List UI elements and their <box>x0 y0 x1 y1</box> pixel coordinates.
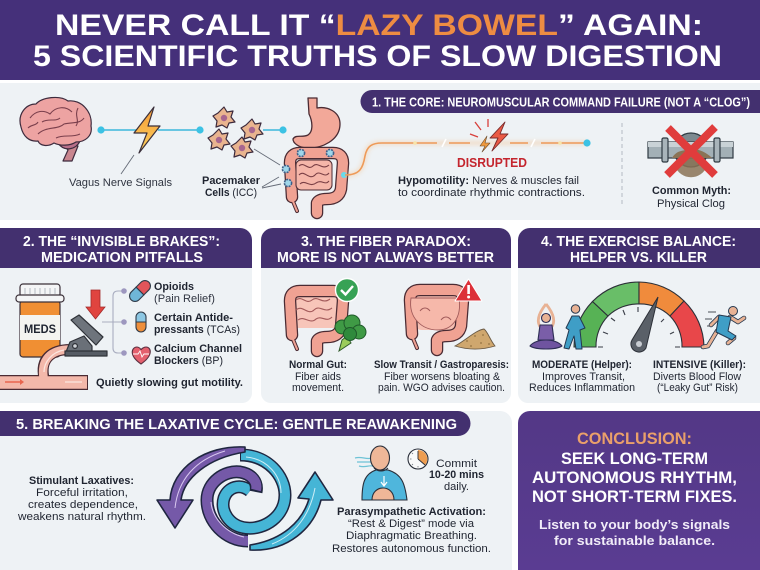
text: commit: Commit <box>436 458 477 470</box>
title line 1: NEVER CALL IT “ LAZY BOWEL ” AGAIN: <box>55 9 703 42</box>
text: intensive: (“Leaky Gut” Risk) <box>657 382 738 394</box>
text: parasympathetic activation: Restores autonomous function. <box>332 543 491 555</box>
header banner <box>0 0 760 80</box>
icon: fiber pile <box>455 329 495 349</box>
label: pacemaker cells <box>202 175 261 199</box>
conclusion statement <box>532 450 737 506</box>
label: pacemaker cells: Pacemaker <box>202 175 261 187</box>
icon: green check <box>336 278 358 302</box>
icon: brain <box>20 97 91 161</box>
text: slow transit: Slow Transit / Gastroparesis: <box>374 359 509 371</box>
text: commit: 10-20 mins <box>429 469 484 481</box>
icon: meds bottle: MEDS <box>24 324 56 336</box>
icon: brake pedal <box>65 315 107 356</box>
purple outer arrow <box>157 447 245 528</box>
cyan inner spiral <box>223 455 285 528</box>
text: moderate <box>529 359 635 394</box>
conclusion subtext <box>539 517 730 548</box>
panel 4 heading: HELPER VS. KILLER <box>570 250 707 266</box>
text: normal gut: Normal Gut: <box>289 359 347 371</box>
panel 3 heading: MORE IS NOT ALWAYS BETTER <box>277 250 495 266</box>
panel 3 heading: 3. THE FIBER PARADOX: <box>301 234 471 250</box>
text: parasympathetic activation: Diaphragmatic Breathing. <box>346 530 477 542</box>
pointer lines <box>121 149 281 188</box>
text: parasympathetic activation: Parasympathetic Activation: <box>337 506 486 518</box>
panel: conclusion <box>518 411 760 570</box>
title line 2: 5 SCIENTIFIC TRUTHS OF SLOW DIGESTION <box>33 40 722 73</box>
cyan outer arrow <box>250 472 333 550</box>
text: quietly slowing: Quietly slowing gut motility. <box>96 377 243 389</box>
panel 5 heading pill: 5. BREAKING THE LAXATIVE CYCLE: GENTLE REAWAKENING <box>16 417 457 433</box>
icon: walking figure <box>564 305 585 349</box>
icon: stomach <box>293 98 340 148</box>
panel 3: fiber paradox <box>261 228 511 403</box>
conclusion statement: SEEK LONG-TERM <box>561 450 708 468</box>
text: stimulant laxatives: Stimulant Laxatives: <box>29 475 134 487</box>
text: intensive: Diverts Blood Flow <box>653 371 741 383</box>
text: common myth: Physical Clog <box>657 198 725 210</box>
text: stimulant laxatives <box>17 475 146 523</box>
icon: clock <box>408 449 428 469</box>
spiral: laxative cycle arrows <box>157 447 333 550</box>
icon: pacemaker cells <box>208 107 263 158</box>
text: slow transit: pain. WGO advises caution. <box>378 382 505 394</box>
text: stimulant laxatives: Forceful irritation, <box>36 487 128 499</box>
panel 2 heading <box>0 228 252 268</box>
text: opioids: Opioids <box>154 281 194 293</box>
text: normal gut: movement. <box>292 382 344 394</box>
gauge needle <box>631 297 658 352</box>
icon: broken signal spark <box>470 119 508 152</box>
disrupted signal line <box>345 139 591 175</box>
vagus signal line <box>97 126 287 134</box>
icon: clogged pipe with cross <box>648 127 733 177</box>
text: intensive <box>653 359 746 394</box>
text: calcium channel blockers: Calcium Channel <box>154 343 242 355</box>
conclusion subtext: Listen to your body’s signals <box>539 517 730 532</box>
text: hypomotility: Hypomotility: Nerves & muscles fail <box>398 175 579 187</box>
panel 2: medication pitfalls <box>0 228 252 403</box>
text: slow transit <box>374 359 509 394</box>
purple inner spiral <box>207 472 256 541</box>
panel 1 heading pill <box>361 90 760 113</box>
icon: red down arrow <box>86 290 105 319</box>
text: moderate: Improves Transit, <box>542 371 625 383</box>
conclusion subtext: for sustainable balance. <box>554 533 715 548</box>
icon: colon with ICC cells <box>282 149 347 213</box>
conclusion statement: NOT SHORT-TERM FIXES. <box>532 488 737 506</box>
icon: heart <box>132 347 150 364</box>
icon: normal gut <box>290 291 343 351</box>
panel 4 heading <box>518 228 760 268</box>
text: moderate: MODERATE (Helper): <box>532 359 632 371</box>
icon: lightning bolt <box>134 107 160 153</box>
text: commit <box>429 458 484 493</box>
text: hypomotility <box>398 175 585 199</box>
text: opioids <box>154 281 215 305</box>
text: stimulant laxatives: weakens natural rhythm. <box>17 511 146 523</box>
text: hypomotility: to coordinate rhythmic contractions. <box>398 187 585 199</box>
text: parasympathetic activation: “Rest & Digest” mode via <box>348 518 475 530</box>
conclusion heading: CONCLUSION: <box>577 430 692 448</box>
icon: pill <box>127 278 153 304</box>
icon: warning triangle <box>455 279 482 301</box>
text: normal gut <box>289 359 347 394</box>
icon: yoga figure <box>530 304 562 349</box>
text: normal gut: Fiber aids <box>295 371 341 383</box>
text: antidepressants: Certain Antide- <box>154 312 233 324</box>
text: common myth: Common Myth: <box>652 185 731 197</box>
text: slow transit: Fiber worsens bloating & <box>384 371 501 383</box>
conclusion statement: AUTONOMOUS RHYTHM, <box>532 469 737 487</box>
icon: gut tube <box>0 349 88 385</box>
label: vagus nerve signals: Vagus Nerve Signals <box>69 177 173 189</box>
icon: meds bottle <box>16 284 64 357</box>
panel 4: exercise balance <box>518 228 760 403</box>
icon: running figure <box>703 306 744 347</box>
icon: slow transit gut <box>410 290 463 350</box>
panel 2 heading: MEDICATION PITFALLS <box>41 250 203 266</box>
text: antidepressants <box>154 312 240 336</box>
panel 5: laxative cycle <box>0 411 512 570</box>
text: opioids: (Pain Relief) <box>154 293 215 305</box>
icon: broccoli <box>335 315 366 351</box>
icon: breathing person <box>355 446 407 500</box>
label: disrupted: DISRUPTED <box>457 155 527 170</box>
gauge <box>574 282 704 352</box>
panel 3 heading <box>261 228 511 268</box>
text: common myth <box>652 185 731 210</box>
panel 5 heading pill <box>0 411 470 436</box>
text: commit: daily. <box>444 481 469 493</box>
panel 1: the core <box>0 83 760 220</box>
text: antidepressants: pressants (TCAs) <box>154 324 240 336</box>
text: stimulant laxatives: creates dependence, <box>28 499 138 511</box>
text: calcium channel blockers <box>154 343 242 367</box>
panel 2 heading: 2. THE “INVISIBLE BRAKES”: <box>23 234 220 250</box>
text: moderate: Reduces Inflammation <box>529 382 635 394</box>
panel 4 heading: 4. THE EXERCISE BALANCE: <box>541 234 736 250</box>
bracket connector <box>102 288 127 356</box>
text: calcium channel blockers: Blockers (BP) <box>154 355 223 367</box>
text: intensive: INTENSIVE (Killer): <box>653 359 746 371</box>
icon: capsule <box>136 312 146 332</box>
label: pacemaker cells: Cells (ICC) <box>205 187 257 199</box>
text: parasympathetic activation <box>332 506 491 555</box>
